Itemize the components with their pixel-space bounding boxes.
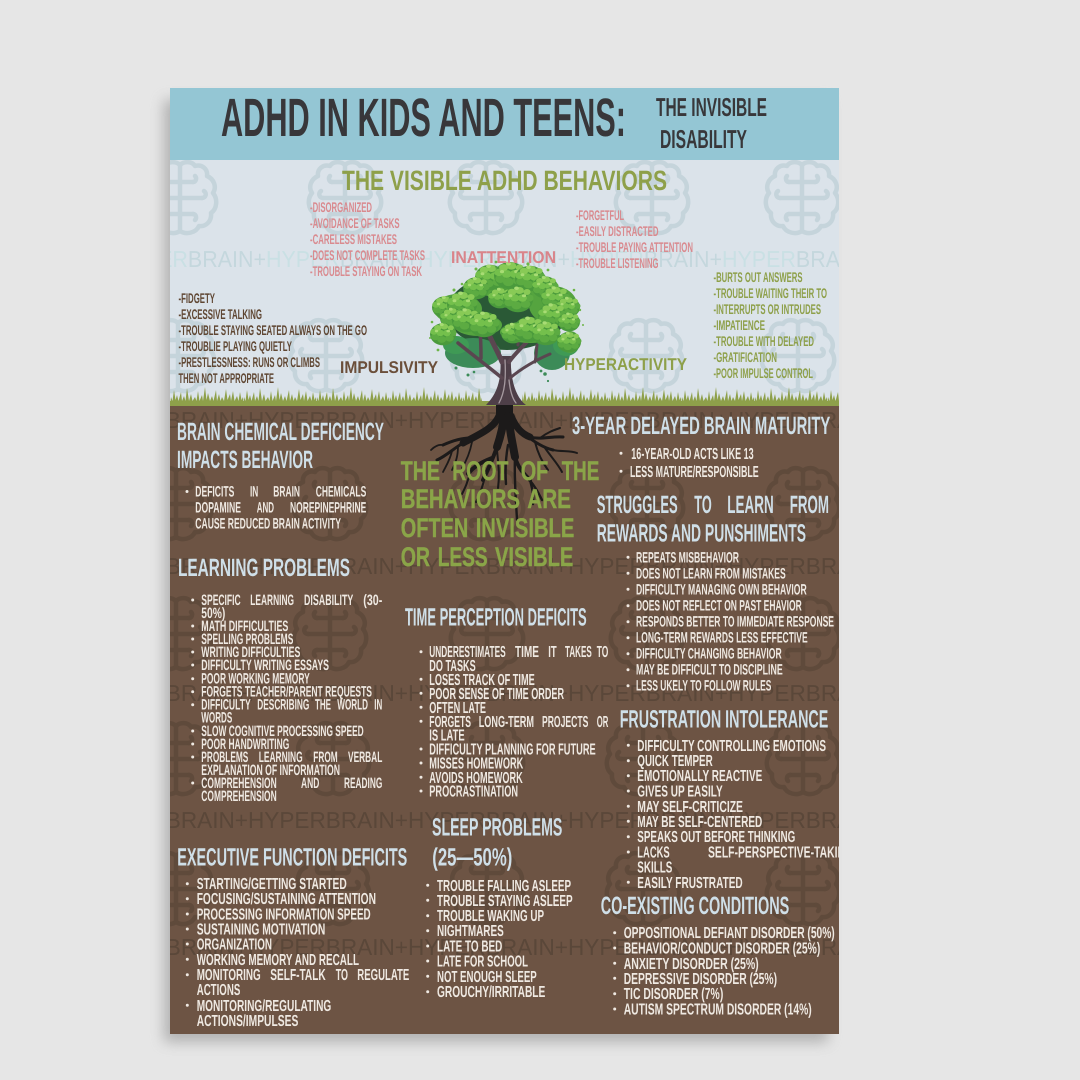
panel: brain chemical deficiency	[177, 418, 384, 532]
list: WORKING MEMORY AND RECALL	[197, 952, 359, 969]
list: impulsivity: -TROUBLIE PLAYING QUIETLY	[178, 338, 292, 354]
list: DIFFICULTY CONTROLLING EMOTIONS	[637, 738, 826, 755]
list: AUTISM SPECTRUM DISORDER (14%)	[624, 1002, 812, 1018]
list: DESCRIBING	[257, 697, 309, 714]
heading: the visible ADHD behaviors: THE VISIBLE ADHD BEHAVIORS	[342, 165, 667, 196]
list: DEPRESSIVE DISORDER (25%)	[624, 971, 777, 988]
list: LATE FOR SCHOOL	[437, 954, 528, 970]
panel: time perception deficits	[405, 604, 609, 800]
list: ANXIETY DISORDER (25%)	[624, 956, 759, 973]
list: IT	[548, 644, 557, 661]
list: inattention right: -EASILY DISTRACTED	[576, 223, 658, 239]
callout: the root of the behaviors: BEHAVIORS	[401, 484, 520, 514]
list: impulsivity: THEN NOT APPROPRIATE	[178, 370, 274, 386]
heading: REWARDS AND PUNSHIMENTS	[597, 520, 806, 548]
list: DOES NOT LEARN FROM MISTAKES	[636, 565, 786, 582]
list: DOPAMINE	[195, 500, 241, 516]
list	[626, 549, 834, 695]
list: hyperactivity: -INTERRUPTS OR INTRUDES	[714, 301, 821, 317]
list: ACTIONS	[197, 982, 240, 999]
poster shadow	[164, 100, 828, 1042]
heading: BRAIN CHEMICAL DEFICIENCY	[177, 418, 384, 446]
list: MONITORING	[197, 967, 261, 984]
list: 50%)	[201, 605, 225, 622]
list: TO	[597, 644, 608, 661]
list: OPPOSITIONAL DEFIANT DISORDER (50%)	[624, 925, 835, 942]
heading: TO	[694, 491, 712, 519]
list: hyperactivity: -GRATIFICATION	[714, 349, 777, 365]
list: DIFFICULTY PLANNING FOR FUTURE	[429, 742, 596, 758]
list: (30-	[363, 592, 382, 609]
list: CHEMICALS	[316, 484, 366, 500]
list: inattention left: -TROUBLE STAYING ON TASK	[310, 263, 422, 279]
list: MONITORING/REGULATING	[197, 998, 331, 1015]
heading	[178, 422, 384, 468]
list: REGULATE	[357, 967, 409, 984]
callout: the root of the behaviors: ARE	[527, 484, 571, 514]
panel: inattention	[310, 199, 693, 279]
panel: executive function deficits	[177, 844, 409, 1030]
list: TAKES	[565, 644, 592, 661]
list: MATH DIFFICULTIES	[201, 618, 288, 635]
heading: (25—50%)	[432, 844, 512, 872]
heading: TIME PERCEPTION DEFICITS	[405, 604, 587, 632]
list: WORDS	[201, 710, 232, 727]
list: REPEATS MISBEHAVIOR	[636, 549, 739, 566]
label: impulsivity: IMPULSIVITY	[340, 358, 439, 377]
list	[627, 738, 853, 892]
panel: hyperactivity	[564, 269, 827, 381]
list: STARTING/GETTING STARTED	[197, 876, 347, 893]
list: DO TASKS	[429, 658, 476, 675]
heading: IMPACTS BEHAVIOR	[177, 446, 313, 474]
list: MAY SELF-CRITICIZE	[637, 799, 743, 816]
heading: STRUGGLES	[597, 491, 678, 519]
list: TIME	[515, 644, 539, 661]
list: IN	[374, 697, 382, 714]
list: TROUBLE STAYING ASLEEP	[437, 893, 573, 910]
list: EMOTIONALLY REACTIVE	[637, 768, 763, 785]
list: LEARNING	[250, 592, 294, 609]
heading	[432, 814, 562, 872]
list: LESS MATURE/RESPONSIBLE	[630, 464, 759, 481]
list: SELF-PERSPECTIVE-TAKING	[708, 844, 853, 862]
heading: LEARNING PROBLEMS	[178, 554, 350, 582]
list: LACKS	[637, 844, 670, 862]
list: impulsivity: -EXCESSIVE TALKING	[178, 306, 262, 322]
list: impulsivity	[178, 290, 367, 386]
list: inattention right: -TROUBLE PAYING ATTENTION	[576, 239, 693, 255]
heading: SLEEP PROBLEMS	[432, 814, 562, 842]
list: DIFFICULTY	[201, 697, 251, 714]
list: NIGHTMARES	[437, 923, 504, 940]
callout: the root of the behaviors: THE	[562, 456, 599, 486]
poster: OR	[597, 714, 609, 731]
heading: 3-YEAR DELAYED BRAIN MATURITY	[572, 412, 830, 440]
list: NOT ENOUGH SLEEP	[437, 969, 537, 986]
poster	[170, 88, 839, 1034]
panel: title banner	[170, 88, 839, 160]
icon: tree with roots	[429, 261, 584, 520]
panel: soil background	[170, 405, 839, 1034]
callout: the root of the behaviors: OR	[401, 542, 430, 572]
list	[191, 592, 382, 805]
list: inattention left	[310, 199, 425, 279]
list: SPECIFIC	[201, 592, 241, 609]
list: LONG-TERM REWARDS LESS EFFECTIVE	[636, 630, 808, 647]
tree back foliage	[443, 286, 578, 370]
list: DIFFICULTY CHANGING BEHAVIOR	[636, 646, 782, 663]
list: SUSTAINING MOTIVATION	[197, 922, 325, 938]
panel: sleep problems	[426, 814, 573, 1001]
list: DIFFICULTY WRITING ESSAYS	[201, 657, 329, 674]
callout: the root of the behaviors: THE	[401, 456, 440, 486]
list: POOR SENSE OF TIME ORDER	[429, 686, 564, 703]
list: PROBLEMS	[201, 749, 248, 766]
list: CAUSE REDUCED BRAIN ACTIVITY	[195, 516, 341, 532]
tree trunk and branches	[458, 330, 550, 405]
list: WRITING DIFFICULTIES	[201, 644, 300, 661]
callout: the root of the behaviors	[401, 456, 599, 572]
scattered leaves	[429, 261, 584, 382]
list: SPEAKS OUT BEFORE THINKING	[637, 829, 795, 846]
list: inattention right: -FORGETFUL	[576, 207, 624, 223]
list: hyperactivity: -BURTS OUT ANSWERS	[714, 269, 802, 285]
list: impulsivity: -FIDGETY	[178, 290, 215, 306]
title: ADHD IN KIDS AND TEENS:	[221, 88, 626, 148]
list: impulsivity: -TROUBLE STAYING SEATED ALWAYS ON THE GO	[178, 322, 367, 338]
subtitle: DISABILITY	[660, 124, 747, 154]
list: FORGETS	[429, 714, 471, 731]
list: ACTIONS/IMPULSES	[197, 1013, 299, 1030]
heading: FROM	[790, 491, 829, 519]
list: inattention left: -AVOIDANCE OF TASKS	[310, 215, 400, 231]
callout: the root of the behaviors: LESS	[438, 542, 488, 572]
list: hyperactivity: -TROUBLE WAITING THEIR TO	[714, 285, 827, 301]
list: FROM	[313, 749, 338, 766]
callout: the root of the behaviors: OFTEN	[401, 513, 468, 543]
list: BRAIN	[273, 484, 300, 500]
list: LOSES TRACK OF TIME	[429, 672, 535, 689]
list: TO	[336, 967, 348, 984]
roots	[431, 405, 577, 520]
list: impulsivity: -PRESTLESSNESS: RUNS OR CLIMBS	[178, 354, 320, 370]
list: SELF-TALK	[270, 967, 326, 984]
heading	[597, 491, 829, 548]
list: POOR WORKING MEMORY	[201, 671, 310, 688]
list	[186, 876, 409, 1030]
list: inattention left: -CARELESS MISTAKES	[310, 231, 397, 247]
tree canopy	[430, 262, 581, 353]
panel: co-existing conditions	[601, 892, 835, 1018]
list: FORGETS TEACHER/PARENT REQUESTS	[201, 684, 372, 701]
panel: 3-year delayed brain maturity	[572, 412, 830, 481]
list	[186, 486, 366, 529]
list: 16-YEAR-OLD ACTS LIKE 13	[631, 446, 754, 463]
list: inattention left: -DISORGANIZED	[310, 199, 372, 215]
list: VERBAL	[348, 749, 382, 766]
callout: the root of the behaviors: OF	[521, 456, 548, 486]
panel: learning problems	[178, 554, 382, 805]
panel: sky background	[170, 160, 839, 406]
list	[620, 446, 759, 481]
subtitle: THE INVISIBLE	[656, 92, 767, 122]
list: THE	[315, 697, 331, 714]
list: LESS UKELY TO FOLLOW RULES	[636, 678, 771, 695]
list: DIFFICULTY MANAGING OWN BEHAVIOR	[636, 581, 807, 598]
heading: EXECUTIVE FUNCTION DEFICITS	[177, 844, 407, 872]
list: LONG-TERM	[479, 714, 534, 731]
list: RESPONDS BETTER TO IMMEDIATE RESPONSE	[636, 614, 834, 631]
label: inattention: INATTENTION	[451, 248, 556, 267]
list: hyperactivity: -POOR IMPULSE CONTROL	[714, 365, 813, 381]
panel: struggles to learn	[597, 491, 834, 695]
list: MAY BE DIFFICULT TO DISCIPLINE	[636, 662, 783, 679]
label: hyperactivity: HYPERACTIVITY	[564, 355, 688, 374]
list: hyperactivity: -TROUBLE WITH DELAYED	[714, 333, 814, 349]
callout: the root of the behaviors: VISIBLE	[495, 542, 573, 572]
list: inattention right	[576, 207, 693, 271]
panel: impulsivity	[178, 290, 439, 386]
list: WORLD	[337, 697, 368, 714]
list: COMPREHENSION	[201, 775, 277, 792]
list	[420, 644, 609, 800]
list: QUICK TEMPER	[637, 753, 713, 770]
list: COMPREHENSION	[201, 788, 277, 805]
list: BEHAVIOR/CONDUCT DISORDER (25%)	[624, 940, 820, 958]
list: POOR HANDWRITING	[201, 736, 289, 753]
list: AVOIDS HOMEWORK	[429, 770, 523, 787]
subtitle	[656, 98, 766, 148]
list: LATE TO BED	[437, 938, 502, 956]
list: UNDERESTIMATES	[429, 644, 506, 661]
heading: FRUSTRATION INTOLERANCE	[620, 705, 828, 733]
list: TROUBLE WAKING UP	[437, 908, 544, 925]
list: AND	[257, 500, 274, 516]
list: PROCESSING INFORMATION SPEED	[197, 906, 371, 924]
list: IN	[250, 484, 258, 500]
callout: the root of the behaviors: ROOT	[452, 456, 509, 486]
list: MISSES HOMEWORK	[429, 756, 524, 772]
list: LEARNING	[259, 749, 303, 766]
list: IS LATE	[429, 728, 465, 744]
list: READING	[344, 775, 382, 792]
list: inattention left: -DOES NOT COMPLETE TASKS	[310, 247, 425, 263]
callout: the root of the behaviors: INVISIBLE	[476, 513, 574, 543]
list: TIC DISORDER (7%)	[624, 986, 723, 1003]
list: GIVES UP EASILY	[637, 784, 723, 800]
list: GROUCHY/IRRITABLE	[437, 984, 546, 1001]
list: FOCUSING/SUSTAINING ATTENTION	[197, 891, 376, 908]
list: SPELLING PROBLEMS	[201, 631, 293, 648]
list: AND	[301, 775, 319, 792]
list: PROJECTS	[542, 714, 588, 731]
panel: frustration intolerance	[620, 705, 853, 892]
list: inattention right: -TROUBLE LISTENING	[576, 255, 659, 271]
list: DISABILITY	[304, 592, 353, 609]
list: TROUBLE FALLING ASLEEP	[437, 878, 571, 895]
list: MAY BE SELF-CENTERED	[637, 814, 762, 831]
list: DOES NOT REFLECT ON PAST EHAVIOR	[636, 598, 802, 615]
list	[426, 878, 573, 1001]
list	[613, 925, 835, 1018]
list: PROCRASTINATION	[429, 784, 518, 800]
list: OFTEN LATE	[429, 700, 486, 717]
list: SKILLS	[637, 860, 673, 876]
list: ORGANIZATION	[197, 936, 272, 954]
list: DEFICITS	[195, 484, 234, 500]
list: EASILY FRUSTRATED	[637, 875, 743, 892]
list: SLOW COGNITIVE PROCESSING SPEED	[201, 723, 364, 740]
heading: CO-EXISTING CONDITIONS	[601, 892, 789, 920]
list: EXPLANATION OF INFORMATION	[201, 762, 340, 779]
list: hyperactivity	[714, 269, 827, 381]
list: hyperactivity: -IMPATIENCE	[714, 317, 765, 333]
list: NOREPINEPHRINE	[290, 500, 366, 516]
grass	[170, 386, 839, 406]
heading: LEARN	[727, 491, 774, 519]
